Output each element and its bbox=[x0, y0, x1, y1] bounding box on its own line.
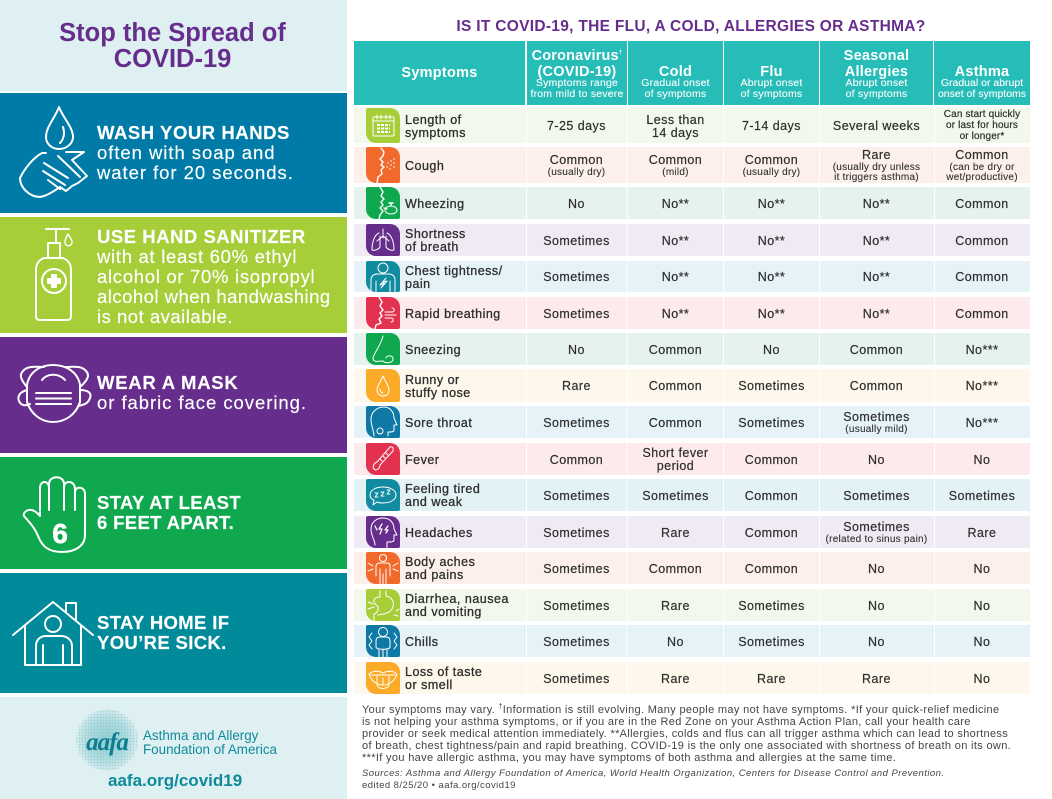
row: shortness of breath bbox=[354, 224, 1030, 256]
row: cough bbox=[354, 147, 1030, 183]
label: Diarrhea, nausea bbox=[405, 592, 509, 606]
icon: speech bubble with z's bbox=[366, 479, 400, 511]
label: or smell bbox=[405, 678, 453, 692]
table header: coronavirus bbox=[527, 41, 627, 105]
row: loss of taste or smell: Rare bbox=[757, 672, 786, 686]
row: chills bbox=[354, 625, 1030, 657]
text: stay six feet apart: STAY AT LEAST bbox=[97, 492, 241, 513]
row: body aches: No bbox=[974, 562, 990, 576]
icon: face breathing bbox=[366, 297, 400, 329]
row: length of symptoms: Can start quickly bbox=[944, 109, 1020, 120]
label: Chest tightness/ bbox=[405, 264, 503, 278]
icon: sanitizer bottle bbox=[35, 228, 73, 321]
label bbox=[405, 227, 466, 254]
panel: wear a mask bbox=[0, 337, 347, 453]
row: feeling tired: Common bbox=[745, 488, 798, 502]
text: use hand sanitizer: alcohol when handwashing bbox=[97, 286, 331, 307]
text: stay home: YOU’RE SICK. bbox=[97, 632, 227, 653]
row: length of symptoms: or last for hours bbox=[946, 120, 1018, 131]
text: stay home: STAY HOME IF bbox=[97, 612, 229, 633]
row: chills: Sometimes bbox=[738, 634, 805, 648]
row: sore throat: Sometimes bbox=[543, 416, 610, 430]
icon: hand with 6 bbox=[22, 476, 86, 553]
panel: organization footer bbox=[0, 697, 347, 799]
text: wash your hands bbox=[96, 122, 294, 183]
row: wheezing bbox=[354, 187, 1030, 219]
row: shortness of breath: No** bbox=[758, 234, 785, 248]
row: headaches: Rare bbox=[661, 526, 690, 540]
sources: Sources: Asthma and Allergy Foundation of America, World Health Organization, Centers for Disease Control and Prevention. bbox=[362, 768, 944, 779]
table header: coronavirus: Coronavirus† bbox=[532, 48, 622, 64]
row: runny nose: No*** bbox=[966, 379, 998, 393]
label: Headaches bbox=[405, 526, 473, 540]
table header: symptoms bbox=[354, 41, 525, 105]
row: length of symptoms: 14 days bbox=[652, 126, 699, 140]
row: cough: (usually dry) bbox=[743, 167, 800, 178]
text: organization name bbox=[143, 728, 277, 757]
row: fever: No bbox=[974, 452, 990, 466]
row: shortness of breath: No** bbox=[662, 234, 689, 248]
table header: asthma: Gradual or abrupt bbox=[941, 77, 1023, 89]
row: diarrhea nausea vomiting: Sometimes bbox=[738, 598, 805, 612]
table header: coronavirus: from mild to severe bbox=[530, 88, 624, 100]
icon: lungs bbox=[366, 224, 400, 256]
row: sore throat: Sometimes bbox=[738, 416, 805, 430]
label bbox=[405, 372, 471, 400]
row: fever bbox=[354, 443, 1030, 475]
label bbox=[405, 482, 480, 509]
row: fever: Common bbox=[745, 452, 798, 466]
table header: seasonal allergies: Seasonal bbox=[844, 48, 909, 64]
row: diarrhea nausea vomiting: Sometimes bbox=[543, 598, 610, 612]
label: Chills bbox=[405, 634, 439, 648]
table header: seasonal allergies: Abrupt onset bbox=[846, 77, 907, 89]
table header: symptoms: Symptoms bbox=[401, 65, 478, 81]
label: and vomiting bbox=[405, 605, 482, 619]
row: feeling tired: Sometimes bbox=[642, 488, 709, 502]
row: feeling tired bbox=[354, 479, 1030, 511]
row: runny nose bbox=[354, 369, 1030, 402]
row: rapid breathing: Sometimes bbox=[543, 306, 610, 320]
row: wheezing: No** bbox=[863, 196, 890, 210]
row: cough: wet/productive) bbox=[946, 172, 1018, 183]
text: stay six feet apart: 6 FEET APART. bbox=[97, 512, 234, 533]
icon: stomach bbox=[366, 589, 400, 621]
row: runny nose: Common bbox=[850, 379, 903, 393]
row: wheezing: No** bbox=[758, 196, 785, 210]
row: cough: (usually dry) bbox=[548, 167, 605, 178]
label bbox=[405, 264, 503, 291]
row: loss of taste or smell: No bbox=[974, 672, 990, 686]
label: Length of bbox=[405, 112, 462, 126]
text: wear a mask: WEAR A MASK bbox=[97, 372, 239, 393]
label: Shortness bbox=[405, 227, 466, 241]
row: cough: (mild) bbox=[662, 167, 689, 178]
row: cough: Rare bbox=[862, 148, 891, 162]
row: cough: (usually dry unless bbox=[833, 162, 920, 172]
row: cough: Common bbox=[550, 153, 603, 167]
row: length of symptoms: 7-14 days bbox=[742, 119, 801, 133]
panel: use hand sanitizer bbox=[0, 217, 347, 333]
text: wash your hands: often with soap and bbox=[97, 142, 276, 163]
footnotes: is not helping your asthma symptoms, or if you are in the Red Zone on your Asthma Action Plan, call your health care bbox=[362, 716, 971, 728]
row: headaches bbox=[354, 516, 1030, 548]
row: sneezing bbox=[354, 333, 1030, 365]
panel: stay six feet apart bbox=[0, 457, 347, 569]
text: use hand sanitizer: alcohol or 70% isopropyl bbox=[97, 266, 315, 287]
row: sore throat: No*** bbox=[966, 416, 998, 430]
row: rapid breathing: No** bbox=[863, 306, 890, 320]
row: fever: No bbox=[868, 452, 885, 466]
logo: AAFA bbox=[76, 709, 138, 771]
row: shortness of breath: No** bbox=[863, 234, 890, 248]
table header: seasonal allergies bbox=[820, 41, 933, 105]
row: length of symptoms: or longer* bbox=[960, 131, 1004, 142]
icon: hands and water drop bbox=[19, 106, 88, 198]
row: diarrhea nausea vomiting: No bbox=[974, 598, 990, 612]
row: diarrhea nausea vomiting bbox=[354, 589, 1030, 621]
row: sneezing: Common bbox=[649, 342, 702, 356]
row: chills: Sometimes bbox=[543, 634, 610, 648]
label: Wheezing bbox=[405, 196, 465, 210]
text: stay six feet apart bbox=[97, 492, 241, 533]
row: cough: Common bbox=[649, 153, 702, 167]
row: fever: period bbox=[657, 459, 694, 473]
label: Body aches bbox=[405, 555, 475, 569]
title: Stop the Spread: COVID-19 bbox=[114, 45, 231, 73]
row: runny nose: Sometimes bbox=[738, 379, 805, 393]
table header: coronavirus: Symptoms range bbox=[536, 77, 618, 89]
table header: flu: of symptoms bbox=[741, 88, 802, 100]
icon: head with sore throat bbox=[366, 406, 400, 438]
icon: nose bbox=[366, 333, 400, 365]
table header: cold: Cold bbox=[659, 64, 692, 80]
sources bbox=[362, 768, 944, 790]
icon: house with person bbox=[12, 601, 94, 666]
row: runny nose: Rare bbox=[562, 379, 591, 393]
row: feeling tired: Sometimes bbox=[949, 488, 1015, 502]
table header: cold: Gradual onset bbox=[641, 77, 710, 89]
table header: flu bbox=[724, 41, 819, 105]
row: headaches: Common bbox=[745, 526, 798, 540]
table header: asthma bbox=[934, 41, 1030, 105]
row: chest tightness: Common bbox=[955, 270, 1009, 284]
row: rapid breathing: Common bbox=[955, 306, 1009, 320]
row: chest tightness: Sometimes bbox=[543, 270, 610, 284]
row: length of symptoms: Several weeks bbox=[833, 119, 920, 133]
panel: stay home bbox=[0, 573, 347, 693]
label: Sore throat bbox=[405, 416, 472, 430]
row: cough: Common bbox=[955, 148, 1009, 162]
table header: coronavirus: (COVID-19) bbox=[537, 64, 617, 80]
row: loss of taste or smell: Rare bbox=[862, 672, 891, 686]
label bbox=[405, 665, 482, 692]
table header: cold: of symptoms bbox=[645, 88, 706, 100]
text: web address: aafa.org/covid19 bbox=[108, 771, 242, 790]
row: feeling tired: Sometimes bbox=[543, 488, 610, 502]
row: fever: Common bbox=[550, 452, 603, 466]
row: length of symptoms: Less than bbox=[646, 112, 705, 126]
label: stuffy nose bbox=[405, 386, 471, 400]
footnotes: Your symptoms may vary. †Information is still evolving. Many people may not have symptoms. *If your quick-relief medicine bbox=[362, 703, 999, 716]
label bbox=[405, 555, 475, 582]
row: shortness of breath: Sometimes bbox=[543, 234, 610, 248]
text: use hand sanitizer: is not available. bbox=[97, 306, 233, 327]
text: wash your hands: water for 20 seconds. bbox=[97, 162, 294, 183]
label: Sneezing bbox=[405, 342, 461, 356]
table header: flu: Flu bbox=[760, 64, 783, 80]
label: Runny or bbox=[405, 372, 460, 386]
table header: cold bbox=[628, 41, 723, 105]
label: Fever bbox=[405, 452, 439, 466]
row: sneezing: No bbox=[763, 342, 780, 356]
row: sneezing: Common bbox=[850, 342, 903, 356]
row: cough: it triggers asthma) bbox=[834, 172, 919, 183]
icon: wheezing face with inhaler bbox=[366, 187, 400, 219]
row: sore throat: Common bbox=[649, 416, 702, 430]
row: wheezing: No bbox=[568, 196, 585, 210]
row: sore throat: (usually mild) bbox=[845, 424, 908, 435]
text: organization name: Asthma and Allergy bbox=[143, 728, 258, 743]
text: organization name: Foundation of America bbox=[143, 742, 277, 757]
table header: asthma: onset of symptoms bbox=[938, 88, 1026, 100]
table header: flu: Abrupt onset bbox=[741, 77, 802, 89]
icon: calendar bbox=[366, 108, 400, 143]
icon: body with aches bbox=[366, 552, 400, 584]
icon: person shivering bbox=[366, 625, 400, 657]
label: Rapid breathing bbox=[405, 306, 501, 320]
table header: seasonal allergies: of symptoms bbox=[846, 88, 907, 100]
text: use hand sanitizer bbox=[96, 226, 331, 327]
row: sore throat bbox=[354, 406, 1030, 438]
text: wash your hands: WASH YOUR HANDS bbox=[97, 122, 290, 143]
label: of breath bbox=[405, 240, 459, 254]
panel: left heading bbox=[0, 0, 347, 91]
label bbox=[405, 592, 509, 619]
row: chills: No bbox=[974, 634, 990, 648]
footnotes: of breath, chest tightness/pain and rapid breathing. COVID-19 is the only one associated with shortness of breath on its own. bbox=[362, 740, 1011, 752]
row: body aches: No bbox=[868, 562, 885, 576]
text: use hand sanitizer: USE HAND SANITIZER bbox=[97, 226, 306, 247]
row: feeling tired: Sometimes bbox=[843, 488, 910, 502]
icon: mouth with tongue bbox=[366, 662, 400, 694]
row: body aches: Sometimes bbox=[543, 562, 610, 576]
row: loss of taste or smell: Rare bbox=[661, 672, 690, 686]
footnotes: ***If you have allergic asthma, you may have symptoms of both asthma and allergies at the same time. bbox=[362, 752, 896, 764]
title: Stop the Spread: Stop the Spread of bbox=[59, 19, 286, 47]
footnotes bbox=[362, 703, 1011, 764]
row: fever: Short fever bbox=[642, 446, 709, 460]
row: body aches: Common bbox=[649, 562, 702, 576]
icon: head with pain bbox=[366, 516, 400, 548]
label bbox=[405, 112, 466, 140]
row: rapid breathing: No** bbox=[758, 306, 785, 320]
row: chest tightness bbox=[354, 261, 1030, 292]
title: Stop the Spread bbox=[59, 19, 286, 73]
label: and pains bbox=[405, 568, 464, 582]
label: pain bbox=[405, 276, 431, 290]
text: use hand sanitizer: with at least 60% ethyl bbox=[97, 246, 297, 267]
row: length of symptoms: 7-25 days bbox=[547, 119, 606, 133]
row: chest tightness: No** bbox=[863, 270, 890, 284]
text: stay home bbox=[97, 612, 229, 653]
row: rapid breathing bbox=[354, 297, 1030, 329]
row: headaches: (related to sinus pain) bbox=[826, 534, 927, 545]
text: wear a mask bbox=[96, 372, 307, 414]
label: and weak bbox=[405, 495, 463, 509]
icon: thermometer bbox=[366, 443, 400, 475]
row: diarrhea nausea vomiting: Rare bbox=[661, 598, 690, 612]
footnotes: provider or seek medical attention immediately. **Allergies, colds and flus can all trigger asthma which can lead to shortness bbox=[362, 728, 1008, 740]
row: body aches: Common bbox=[745, 562, 798, 576]
label: Feeling tired bbox=[405, 482, 480, 496]
row: length of symptoms bbox=[354, 108, 1030, 143]
row: loss of taste or smell: Sometimes bbox=[543, 672, 610, 686]
row: loss of taste or smell bbox=[354, 662, 1030, 694]
row: headaches: Sometimes bbox=[843, 520, 910, 534]
label: Cough bbox=[405, 158, 444, 172]
table title: IS IT COVID-19, THE FLU, A COLD, ALLERGIES OR ASTHMA? bbox=[456, 18, 926, 35]
label: Loss of taste bbox=[405, 665, 482, 679]
logo: AAFA: aafa bbox=[86, 729, 128, 756]
row: headaches: Sometimes bbox=[543, 526, 610, 540]
row: diarrhea nausea vomiting: No bbox=[868, 598, 885, 612]
text: wear a mask: or fabric face covering. bbox=[97, 392, 307, 413]
panel: wash your hands bbox=[0, 93, 347, 213]
table header: seasonal allergies: Allergies bbox=[845, 64, 908, 80]
row: cough: Common bbox=[745, 153, 798, 167]
icon: droplet bbox=[366, 369, 400, 402]
row: chills: No bbox=[868, 634, 885, 648]
row: chest tightness: No** bbox=[758, 270, 785, 284]
row: wheezing: Common bbox=[955, 196, 1009, 210]
row: cough: (can be dry or bbox=[949, 162, 1015, 172]
table header: asthma: Asthma bbox=[955, 64, 1009, 80]
row: headaches: Rare bbox=[968, 526, 996, 540]
row: chest tightness: No** bbox=[662, 270, 689, 284]
label: symptoms bbox=[405, 126, 466, 140]
icon: coughing face bbox=[366, 147, 400, 183]
row: runny nose: Common bbox=[649, 379, 702, 393]
row: chills: No bbox=[667, 634, 684, 648]
icon: face mask bbox=[17, 364, 92, 423]
icon: person with chest pain bbox=[366, 261, 400, 292]
row: wheezing: No** bbox=[662, 196, 689, 210]
row: body aches bbox=[354, 552, 1030, 584]
sources: edited 8/25/20 • aafa.org/covid19 bbox=[362, 780, 516, 790]
icon: hand with 6: 6 bbox=[52, 518, 68, 549]
row: shortness of breath: Common bbox=[955, 234, 1009, 248]
row: sneezing: No*** bbox=[966, 342, 998, 356]
row: rapid breathing: No** bbox=[662, 306, 689, 320]
row: sneezing: No bbox=[568, 342, 585, 356]
row: sore throat: Sometimes bbox=[843, 410, 910, 424]
